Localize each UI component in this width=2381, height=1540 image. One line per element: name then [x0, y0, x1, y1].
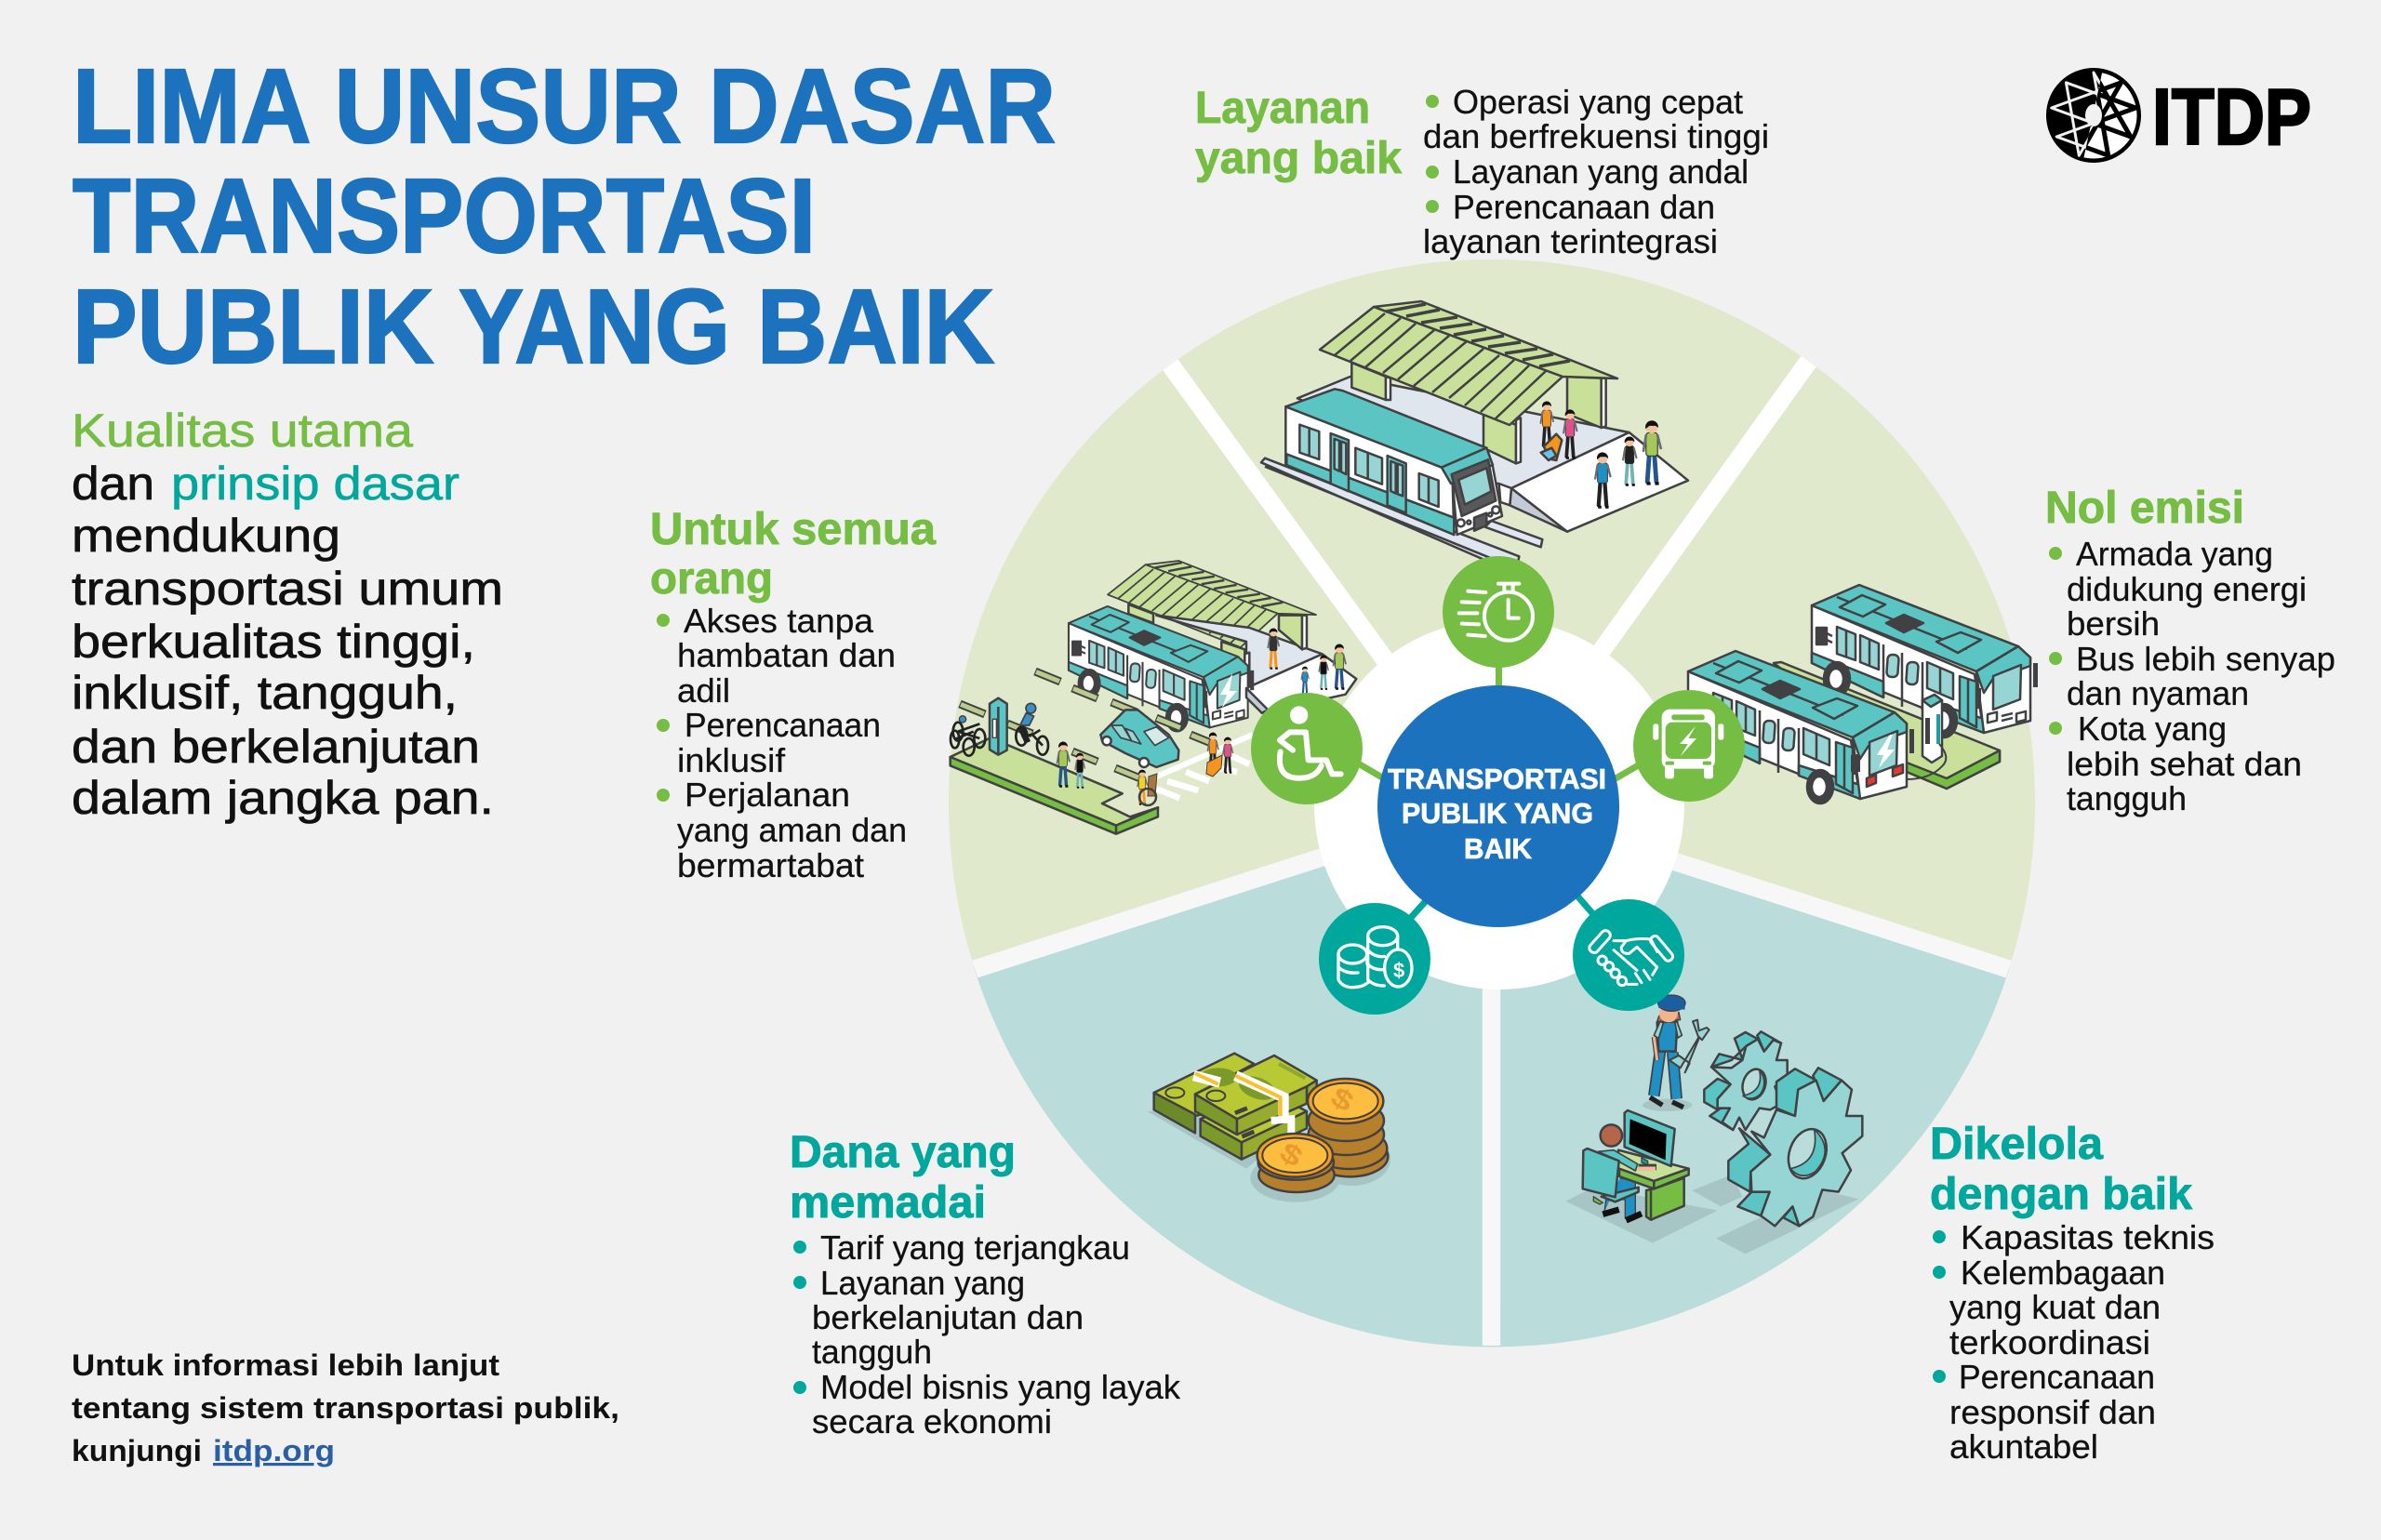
title — [73, 47, 1056, 385]
text block: Layanan yang baik: yang baik — [1195, 134, 1402, 183]
text block: Untuk semua orang: hambatan dan — [677, 636, 896, 674]
text block: Untuk semua orang: Perjalanan — [685, 776, 850, 814]
text block: Untuk semua orang — [650, 505, 936, 884]
text block: Untuk semua orang: yang aman dan — [677, 811, 907, 849]
text block: Untuk semua orang: Untuk semua — [650, 505, 936, 554]
central circle: good public transport: BAIK — [1464, 832, 1533, 865]
intro text block: mendukung — [72, 510, 340, 562]
text block: Layanan yang baik: Operasi yang cepat — [1453, 83, 1743, 121]
intro text block: dan berkelanjutan — [72, 721, 480, 773]
text block: Nol emisi: tangguh — [2067, 779, 2187, 817]
icon: stopwatch — [1443, 556, 1554, 668]
text block: Layanan yang baik: Perencanaan dan — [1453, 188, 1715, 226]
text block: Dikelola dengan baik: Dikelola — [1930, 1120, 2103, 1169]
text block: Dana yang memadai — [790, 1128, 1181, 1440]
text block: Dikelola dengan baik: Perencanaan — [1959, 1358, 2155, 1396]
text block: Dikelola dengan baik: yang kuat dan — [1949, 1288, 2161, 1326]
footer note: tentang sistem transportasi publik, — [72, 1391, 619, 1425]
intro text block: dan — [72, 458, 154, 510]
illustration: electric buses and charger — [1688, 585, 2038, 803]
title: PUBLIK YANG BAIK — [73, 268, 994, 385]
logo: ITDP — [2046, 68, 2311, 163]
footer note: itdp.org — [213, 1434, 335, 1467]
text block: Layanan yang baik: layanan terintegrasi — [1423, 222, 1718, 260]
icon: electric bus — [1633, 690, 1745, 802]
logo: ITDP: ITDP — [2152, 73, 2311, 162]
text block: Nol emisi: Bus lebih senyap — [2076, 640, 2335, 678]
text block: Dana yang memadai: memadai — [790, 1178, 986, 1228]
connectors: spokes to central circle — [1349, 656, 1651, 930]
intro text block: inklusif, tangguh, — [72, 667, 458, 719]
footer note: Untuk informasi lebih lanjut — [72, 1348, 499, 1382]
text block: Layanan yang baik: Layanan — [1195, 84, 1370, 133]
text block: Dana yang memadai: Model bisnis yang layak — [820, 1368, 1181, 1406]
text block: Nol emisi — [2045, 484, 2335, 817]
illustration: money stacks and coins: $ — [1325, 1082, 1359, 1119]
text block: Nol emisi: Kota yang — [2078, 710, 2227, 748]
text block: Dikelola dengan baik — [1930, 1120, 2215, 1466]
title: LIMA UNSUR DASAR — [73, 47, 1056, 165]
intro text block: Kualitas utama — [72, 405, 413, 457]
central circle: good public transport — [1377, 685, 1619, 927]
text block: Untuk semua orang: adil — [677, 671, 730, 710]
text block: Dana yang memadai: tangguh — [812, 1333, 932, 1371]
intro text block — [72, 405, 503, 824]
illustration: money stacks and coins — [1147, 1054, 1390, 1202]
text block: Dikelola dengan baik: responsif dan — [1949, 1393, 2156, 1431]
text block: Dikelola dengan baik: Kelembagaan — [1961, 1254, 2165, 1292]
text block: Nol emisi: lebih sehat dan — [2067, 745, 2302, 783]
illustration: accessible street with bus, station and cyclists — [951, 561, 1356, 834]
text block: Dikelola dengan baik: Kapasitas teknis — [1961, 1218, 2215, 1256]
central circle: good public transport: TRANSPORTASI — [1388, 763, 1606, 795]
intro text block: berkualitas tinggi, — [72, 616, 475, 668]
text block: Dikelola dengan baik: dengan baik — [1930, 1170, 2192, 1219]
text block: Nol emisi: dan nyaman — [2067, 674, 2249, 712]
text block: Nol emisi: bersih — [2067, 604, 2160, 643]
footer note — [72, 1348, 619, 1467]
text block: Dana yang memadai: Layanan yang — [820, 1264, 1025, 1302]
text block: Untuk semua orang: inklusif — [677, 741, 786, 779]
text block: Dana yang memadai: Tarif yang terjangkau — [820, 1228, 1130, 1267]
text block: Untuk semua orang: orang — [650, 554, 773, 604]
intro text block: dalam jangka pan. — [72, 772, 494, 824]
central circle: good public transport: PUBLIK YANG — [1402, 797, 1593, 830]
title: TRANSPORTASI — [73, 157, 816, 274]
icon: coins and money: $ — [1393, 959, 1404, 982]
text block: Dana yang memadai: berkelanjutan dan — [812, 1298, 1084, 1336]
text block: Nol emisi: Armada yang — [2076, 535, 2273, 573]
panel: circular diagram background — [949, 259, 2035, 1358]
footer note: kunjungi — [72, 1434, 202, 1467]
icon: wheelchair — [1251, 693, 1363, 804]
intro text block: prinsip dasar — [171, 458, 459, 510]
text block: Untuk semua orang: Akses tanpa — [684, 602, 874, 640]
illustration: gears, mechanic and computer operator — [1565, 995, 1862, 1254]
illustration: train station — [1261, 301, 1688, 564]
text block: Nol emisi: Nol emisi — [2045, 484, 2244, 533]
text block: Untuk semua orang: bermartabat — [677, 846, 864, 884]
text block: Layanan yang baik — [1195, 83, 1769, 260]
text block: Dana yang memadai: secara ekonomi — [812, 1402, 1052, 1440]
text block: Nol emisi: didukung energi — [2067, 570, 2307, 608]
icon: handshake — [1573, 899, 1684, 1011]
text block: Untuk semua orang: Perencanaan — [685, 706, 881, 744]
text block: Dikelola dengan baik: akuntabel — [1949, 1427, 2098, 1466]
intro text block: transportasi umum — [72, 563, 503, 615]
text block: Dikelola dengan baik: terkoordinasi — [1949, 1323, 2150, 1361]
text block: Dana yang memadai: Dana yang — [790, 1128, 1016, 1177]
text block: Layanan yang baik: dan berfrekuensi tinggi — [1423, 117, 1769, 155]
illustration: money stacks and coins: $ — [1274, 1136, 1308, 1174]
text block: Layanan yang baik: Layanan yang andal — [1453, 153, 1749, 191]
icon: coins and money — [1319, 903, 1430, 1015]
